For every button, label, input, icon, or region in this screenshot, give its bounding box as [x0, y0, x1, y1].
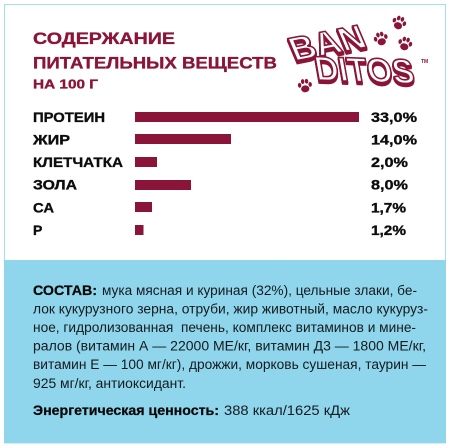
- icon: paw top: [390, 14, 408, 31]
- text block: ingredients: ралов (витамин А — 22000 МЕ/кг, витамин Д3 — 1800 МЕ/кг,: [33, 338, 426, 354]
- logo word: BAN: BAN: [283, 19, 372, 68]
- row: fat: [32, 132, 418, 148]
- text block: energy value: 388 ккал/1625 кДж: [224, 403, 350, 418]
- icon: paw middle right: [397, 35, 414, 52]
- text block: ingredients: 925 мг/кг, антиоксидант.: [33, 376, 186, 391]
- text block: energy value: Энергетическая ценность:: [33, 403, 219, 418]
- text block: ingredients: [33, 283, 428, 391]
- heading: title: ПИТАТЕЛЬНЫХ ВЕЩЕСТВ: [33, 54, 277, 72]
- heading: title: НА 100 Г: [33, 78, 98, 92]
- row: fiber: [33, 154, 409, 170]
- row: phosphorus: Р: [33, 222, 42, 238]
- text block: ingredients: витамин Е — 100 мг/кг), дрожжи, морковь сушеная, таурин —: [33, 357, 426, 372]
- icon: paw middle left: [372, 30, 389, 47]
- row: fiber: 2,0%: [371, 154, 409, 170]
- logo: Bandits wordmark: [283, 14, 428, 93]
- row: fat: 14,0%: [371, 132, 418, 148]
- logo trademark: TM: [421, 59, 428, 65]
- row: ash: 8,0%: [371, 176, 409, 192]
- row: calcium: 1,7%: [371, 200, 407, 216]
- text block: ingredients: СОСТАВ:: [33, 283, 97, 298]
- row: calcium: СА: [33, 200, 54, 216]
- row: protein: ПРОТЕИН: [33, 109, 105, 125]
- row: fat: ЖИР: [32, 132, 70, 148]
- heading: title: СОДЕРЖАНИЕ: [33, 30, 175, 48]
- text block: ingredients: ное, гидролизованная печень, комплекс витаминов и мине-: [33, 320, 416, 335]
- icon: paw bottom: [297, 78, 313, 93]
- panel: composition: [4, 260, 446, 443]
- text block: energy value: [33, 403, 350, 418]
- row: protein: [33, 109, 418, 125]
- text block: ingredients: мука мясная и куриная (32%), цельные злаки, бе-: [102, 283, 417, 298]
- row: ash: ЗОЛА: [33, 176, 77, 192]
- row: calcium: [33, 200, 407, 216]
- row: fiber: КЛЕТЧАТКА: [33, 154, 123, 170]
- row: protein: 33,0%: [371, 109, 418, 125]
- logo word: DITOS: DITOS: [312, 50, 417, 91]
- bar chart: nutrients: [32, 109, 418, 238]
- row: ash: [33, 176, 409, 192]
- heading: title: [33, 30, 277, 92]
- row: phosphorus: 1,2%: [371, 222, 407, 238]
- text block: ingredients: лок кукурузного зерна, отруби, жир животный, масло кукуруз-: [33, 302, 428, 316]
- row: phosphorus: [33, 222, 407, 238]
